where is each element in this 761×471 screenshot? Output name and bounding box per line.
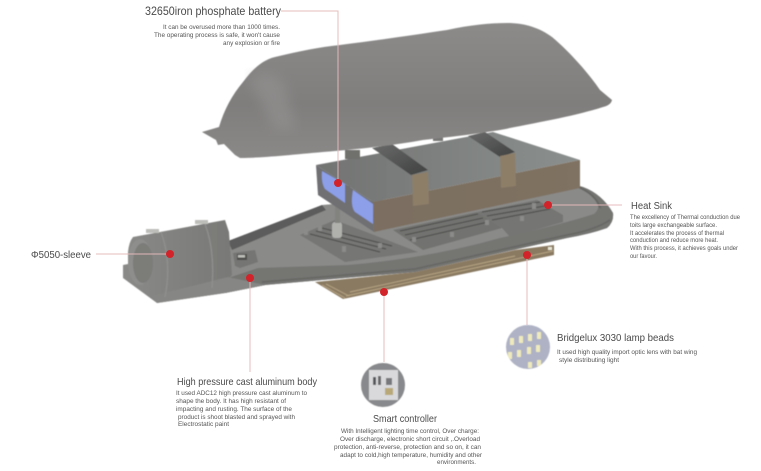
callout: heat sink: conduction and reduce more heat. bbox=[630, 237, 718, 244]
callout: heat sink: toits large exchangeable surface. bbox=[630, 222, 717, 229]
product: exploded lamp illustration bbox=[123, 23, 613, 303]
callout: heat sink: our favour. bbox=[630, 253, 657, 260]
callout: smart controller: protection, anti-reverse, protection and so on, it can bbox=[334, 444, 482, 451]
callout: lamp beads: Bridgelux 3030 lamp beads bbox=[557, 332, 674, 344]
leader lines bbox=[96, 11, 622, 372]
callout: aluminum body bbox=[176, 376, 318, 428]
callout: smart controller: environments. bbox=[437, 459, 476, 466]
bracket bbox=[233, 250, 258, 268]
heat sink fins bbox=[300, 200, 563, 262]
callout: lamp beads bbox=[557, 332, 697, 364]
callout: aluminum body: Electrostatic paint bbox=[178, 421, 229, 428]
callout: aluminum body: product is shoot blasted and sprayed with bbox=[178, 414, 295, 421]
callout: heat sink: With this process, it achieves goals under bbox=[630, 245, 738, 252]
callout: aluminum body: High pressure cast aluminum body bbox=[177, 376, 318, 388]
callout: lamp beads: style distributing light bbox=[559, 357, 619, 364]
marker dots bbox=[166, 179, 552, 296]
callout: battery: The operating process is safe, it won't cause bbox=[154, 32, 280, 39]
callout: battery: It can be overused more than 1000 times. bbox=[163, 24, 280, 31]
callout: heat sink: It accelerates the process of thermal bbox=[630, 230, 724, 237]
callout: heat sink: The excellency of Thermal conduction due bbox=[630, 214, 740, 221]
callout: battery: any explosion or fire bbox=[223, 40, 280, 47]
battery box bbox=[316, 132, 580, 232]
aluminum body tray bbox=[200, 184, 613, 293]
callout: battery bbox=[145, 4, 281, 47]
icon: controller photo bbox=[361, 363, 405, 407]
callout: aluminum body: shape the body. It has high resistant of bbox=[176, 398, 286, 405]
callout: aluminum body: It used ADC12 high pressure cast aluminum to bbox=[176, 390, 307, 397]
callout: smart controller: Over discharge, electronic short circuit ,.Overload bbox=[340, 436, 481, 443]
callout: heat sink: Heat Sink bbox=[631, 201, 673, 212]
callout: battery: 32650iron phosphate battery bbox=[145, 4, 281, 18]
callout: smart controller: Smart controller bbox=[373, 413, 437, 425]
callout: smart controller: With Intelligent lighting time control, Over charge: bbox=[341, 428, 479, 435]
icon: lamp beads photo bbox=[506, 325, 550, 369]
mounting straps bbox=[372, 132, 516, 206]
callout: sleeve: Φ5050-sleeve bbox=[31, 250, 91, 261]
callout: smart controller bbox=[334, 413, 482, 466]
cover dome bbox=[202, 23, 612, 158]
sleeve bbox=[123, 220, 265, 303]
lamp module underneath body bbox=[315, 245, 554, 299]
callout: lamp beads: It used high quality import optic lens with bat wing bbox=[557, 349, 697, 356]
callout: aluminum body: impacting and rusting. The surface of the bbox=[176, 406, 292, 413]
rim bbox=[225, 184, 613, 293]
callout: smart controller: adapt to cold,high temperature, humidity and other bbox=[340, 452, 482, 459]
callout: heat sink bbox=[630, 201, 740, 260]
